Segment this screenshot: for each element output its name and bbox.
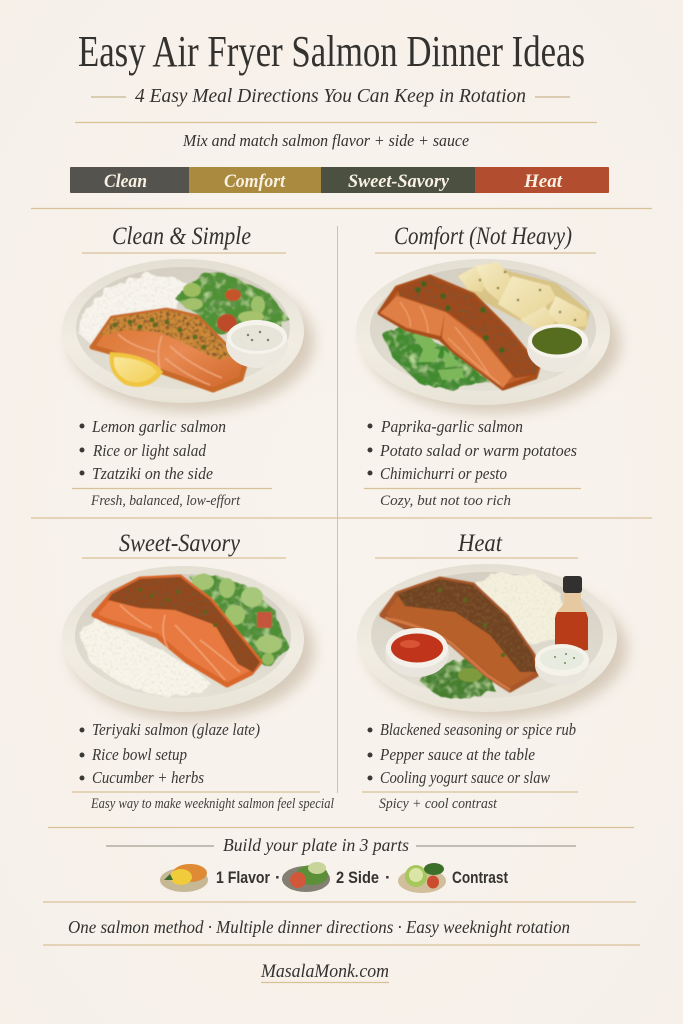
subtitle: 4 Easy Meal Directions You Can Keep in Rotation (135, 85, 526, 107)
tagline: Cozy, but not too rich (380, 493, 511, 509)
label: 1 flavor: 1 Flavor (216, 868, 270, 887)
bullet list: Chimichurri or pesto (380, 464, 507, 483)
category colour band: Comfort (224, 171, 286, 192)
plate: lemon garlic salmon (62, 259, 314, 412)
heading: Comfort (Not Heavy) (394, 223, 572, 250)
tagline: mix and match: Mix and match salmon flavor + side + sauce (182, 131, 469, 150)
bullet list: Paprika-garlic salmon (380, 417, 523, 436)
plate: blackened salmon (357, 564, 627, 719)
bullet list (370, 720, 576, 787)
build your plate row: · (385, 868, 391, 887)
plate: paprika garlic salmon (356, 259, 620, 413)
icon: flavor dish (160, 864, 208, 892)
heading: Heat (457, 530, 503, 557)
bullet list: Potato salad or warm potatoes (379, 441, 577, 460)
tagline: Fresh, balanced, low-effort (90, 493, 241, 509)
build your plate row (160, 862, 508, 893)
bullet list: Blackened seasoning or spice rub (380, 720, 576, 739)
bullet list (82, 417, 226, 483)
panel: sweet savory (62, 530, 334, 812)
bullet list: Pepper sauce at the table (379, 745, 535, 764)
bullet list (370, 417, 577, 483)
category colour band (70, 167, 609, 193)
category colour band: Heat (523, 171, 563, 192)
panel: heat (357, 530, 627, 812)
panel: comfort not heavy (356, 223, 620, 509)
bullet list (82, 720, 260, 787)
summary line: One salmon method · Multiple dinner directions · Easy weeknight rotation (68, 917, 570, 937)
bullet list: Rice bowl setup (91, 745, 187, 764)
build your plate heading: Build your plate in 3 parts (223, 835, 409, 855)
bullet list: Cucumber + herbs (92, 768, 204, 787)
label: contrast: Contrast (452, 868, 508, 887)
category colour band: Sweet-Savory (348, 171, 450, 192)
bullet list: Tzatziki on the side (92, 464, 213, 483)
category colour band: Clean (104, 171, 147, 192)
source credit: MasalaMonk.com (260, 962, 389, 982)
tagline: Easy way to make weeknight salmon feel special (90, 796, 334, 812)
build your plate row: · (275, 868, 281, 887)
bullet list: Rice or light salad (92, 441, 207, 460)
bullet list: Cooling yogurt sauce or slaw (380, 768, 550, 787)
heading: Clean & Simple (112, 223, 251, 250)
bullet list: Teriyaki salmon (glaze late) (92, 720, 260, 739)
icon: side dish (282, 862, 330, 892)
plate: teriyaki salmon (62, 566, 314, 720)
icon: contrast dish (398, 863, 446, 893)
label: 2 side: 2 Side (336, 868, 379, 887)
heading: Sweet-Savory (119, 530, 241, 557)
tagline: Spicy + cool contrast (379, 796, 498, 812)
bullet list: Lemon garlic salmon (91, 417, 226, 436)
panel: clean and simple (62, 223, 314, 509)
